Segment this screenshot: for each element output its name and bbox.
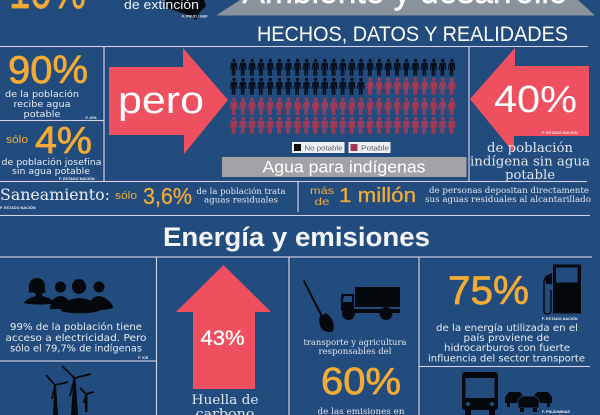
text: energy from hydrocarbons: influencia del sector transporte — [428, 354, 585, 364]
stat: 75 percent: 75% — [448, 269, 529, 313]
source: pnud minae: F. PNUD/MINAE — [542, 410, 571, 414]
legend: No potable — [304, 146, 343, 152]
banner: agua para indigenas — [222, 157, 466, 177]
text: transport and agriculture: transporte y agricultura — [304, 338, 407, 347]
strip: saneamiento: aguas residuales — [204, 196, 278, 204]
panel: 4 percent: de población josefina — [2, 157, 101, 168]
icon: black animal silhouette — [165, 0, 206, 20]
stat: 60 percent: 60% — [321, 361, 401, 403]
text: transport and agriculture: responsables del — [318, 347, 392, 356]
text: electricity: sólo el 79,7% de indígenas — [10, 344, 142, 354]
panel: 90 percent — [5, 49, 97, 120]
arrow: 43 percent: 43% — [200, 327, 244, 350]
strip: mas de 1 millon: más — [310, 185, 334, 197]
strip: saneamiento: F. ESTADO NACIÓN — [0, 205, 36, 210]
text: de poblacion indigena sin agua potable — [470, 141, 590, 183]
panel: 90 percent: 90% — [8, 49, 88, 92]
text: de extinción — [124, 0, 208, 18]
text: electricity: acceso a electricidad. Pero — [6, 333, 147, 344]
heading: hechos, datos y realidades: HECHOS, DATOS Y REALIDADES — [257, 23, 568, 46]
text: energy from hydrocarbons: de la energía utilizada en el — [436, 323, 578, 334]
title banner — [216, 0, 595, 16]
panel: 4 percent: F. ESTADO NACIÓN — [59, 176, 95, 181]
panel: 4 percent: sólo — [6, 134, 28, 146]
legend: Potable — [361, 146, 389, 152]
text: de poblacion indigena sin agua potable: potable — [505, 168, 555, 183]
text: energy from hydrocarbons — [428, 323, 585, 364]
text: de extinción: F. PNUD / GEF — [182, 14, 208, 18]
icon: truck — [341, 287, 400, 320]
arrow: 40 percent — [470, 48, 589, 153]
panel: 4 percent — [2, 120, 101, 181]
pictogram: agua para indigenas — [230, 59, 455, 134]
icon: bus — [462, 372, 498, 415]
text: de poblacion indigena sin agua potable: indígena sin agua — [470, 154, 590, 170]
text: energy from hydrocarbons: hidrocarburos con fuerte — [444, 343, 570, 354]
arrow: 43 percent — [176, 265, 271, 389]
icon: shovel — [303, 280, 334, 332]
panel: 4 percent: sin agua potable — [12, 167, 90, 177]
text: electricity: 99% de la población tiene — [10, 322, 142, 333]
strip: saneamiento — [0, 183, 286, 210]
strip: mas de 1 millon — [310, 185, 591, 208]
strip: saneamiento: sólo — [115, 190, 137, 202]
strip: saneamiento: Saneamiento: — [0, 185, 110, 204]
panel: 90 percent: de la población — [5, 89, 79, 100]
heading: energia y emisiones: Energía y emisiones — [163, 222, 430, 252]
source: ICE: F. ICE — [138, 356, 149, 360]
text: electricity — [6, 322, 147, 354]
icon: group of people — [24, 278, 113, 313]
source: estado nacion: F. ESTADO NACIÓN — [542, 316, 578, 321]
arrow: pero — [109, 48, 228, 154]
panel: 4 percent: 4% — [35, 120, 92, 162]
legend — [292, 142, 390, 153]
arrow: 40 percent: F. ESTADO NACIÓN — [542, 130, 578, 135]
icon: wind turbines — [46, 366, 94, 415]
strip: mas de 1 millon: de — [314, 196, 330, 208]
icon: fuel pump — [544, 264, 581, 314]
text: huella de carbono: Huella de — [192, 393, 259, 408]
strip: saneamiento: de la población trata — [196, 187, 286, 196]
arrow: 40 percent: 40% — [494, 79, 577, 121]
text: energy from hydrocarbons: país proviene de — [464, 333, 550, 344]
strip: mas de 1 millon: sus aguas residuales al alcantarillado — [425, 195, 591, 204]
panel: 90 percent: potable — [24, 110, 61, 120]
panel: 90 percent: F. AYA — [86, 116, 97, 120]
text: transport and agriculture — [304, 338, 407, 356]
panel: 90 percent: recibe agua — [14, 100, 70, 110]
arrow: pero: pero — [118, 80, 204, 122]
text: huella de carbono — [192, 393, 259, 415]
text: de poblacion indigena sin agua potable: de población — [487, 141, 574, 156]
banner: agua para indigenas: Agua para indígenas — [262, 158, 426, 176]
strip: mas de 1 millon: 1 millón — [339, 185, 416, 207]
icon: cars — [505, 392, 552, 412]
strip: mas de 1 millon: de personas depositan directamente — [429, 186, 589, 195]
strip: saneamiento: 3,6% — [143, 183, 192, 209]
